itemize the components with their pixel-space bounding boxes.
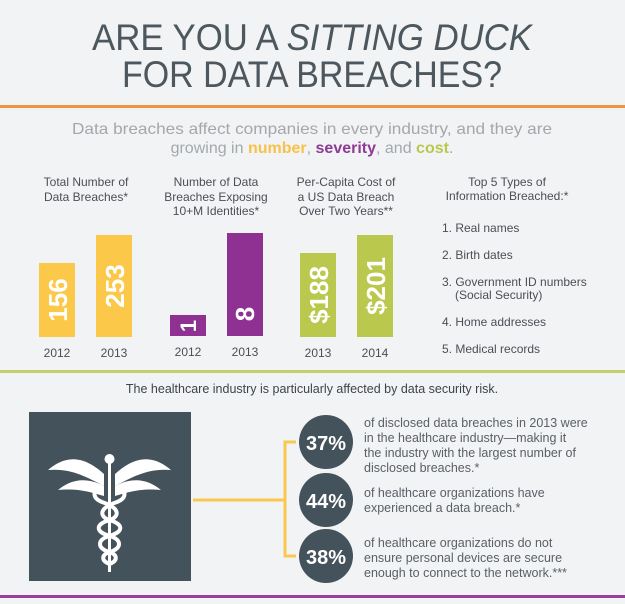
title: FOR DATA BREACHES? [122,54,502,95]
stat 37%: disclosed breaches.* [364,461,479,475]
stat 38%: of healthcare organizations do not [364,536,553,550]
healthcare heading: The healthcare industry is particularly affected by data security risk. [126,382,498,396]
list: top 5 types: (Social Security) [455,288,542,302]
list: top 5 types: Top 5 Types of [468,175,547,189]
stat 44% [299,473,545,527]
chart: 10M+ breaches: Number of Data [174,175,259,189]
list: top 5 types: 3. Government ID numbers [442,275,587,289]
stat 38%: 38% [306,547,346,569]
stat 37%: of disclosed data breaches in 2013 were [364,416,588,430]
stat 44%: experienced a data breach.* [364,501,520,515]
chart: per-capita cost: $201 [361,257,391,315]
chart: total breaches: Data Breaches* [44,190,128,204]
chart: per-capita cost [297,175,396,360]
chart: 10M+ breaches: 2012 [175,345,202,359]
stat 38% [299,529,567,583]
list: top 5 types: 4. Home addresses [442,315,546,329]
stat 37%: the industry with the largest number of [364,446,576,460]
stat 37%: in the healthcare industry—making it [364,431,567,445]
chart: 10M+ breaches: 10+M Identities* [173,204,260,218]
chart: 10M+ breaches: 2013 [232,345,259,359]
chart: per-capita cost: a US Data Breach [298,190,394,204]
connector [193,442,296,556]
chart: per-capita cost: Per-Capita Cost of [297,175,396,189]
panel: caduceus [29,412,191,581]
subtitle: Data breaches affect companies in every industry, and they are [72,121,552,138]
stat 38%: enough to connect to the network.*** [364,566,567,580]
chart: 10M+ breaches: 1 [176,320,201,332]
stat 44%: 44% [306,491,346,513]
chart: total breaches: Total Number of [44,175,129,189]
stat 38%: ensure personal devices are secure [364,551,562,565]
chart: 10M+ breaches: Breaches Exposing [164,190,268,204]
chart: total breaches: 2013 [101,346,128,360]
chart: 10M+ breaches [164,175,268,359]
chart: total breaches: 156 [43,278,73,322]
chart: per-capita cost: $188 [304,266,334,324]
list: top 5 types [442,175,587,356]
list: top 5 types: 2. Birth dates [442,248,513,262]
chart: 10M+ breaches: 8 [230,307,260,321]
title: ARE YOU A SITTING DUCK [92,17,534,58]
chart: total breaches: 253 [100,264,130,308]
chart: per-capita cost: Over Two Years** [299,204,393,218]
stat 44%: of healthcare organizations have [364,486,545,500]
chart: per-capita cost: 2014 [362,346,389,360]
chart: total breaches: 2012 [44,346,71,360]
stat 37% [299,415,588,475]
chart: per-capita cost: 2013 [305,346,332,360]
list: top 5 types: 5. Medical records [442,342,540,356]
subtitle: growing in number, severity, and cost. [171,140,453,157]
stat 37%: 37% [306,433,346,455]
chart: total breaches [39,175,132,360]
list: top 5 types: Information Breached:* [446,189,569,203]
title [92,17,534,95]
subtitle [72,121,552,157]
list: top 5 types: 1. Real names [442,221,519,235]
